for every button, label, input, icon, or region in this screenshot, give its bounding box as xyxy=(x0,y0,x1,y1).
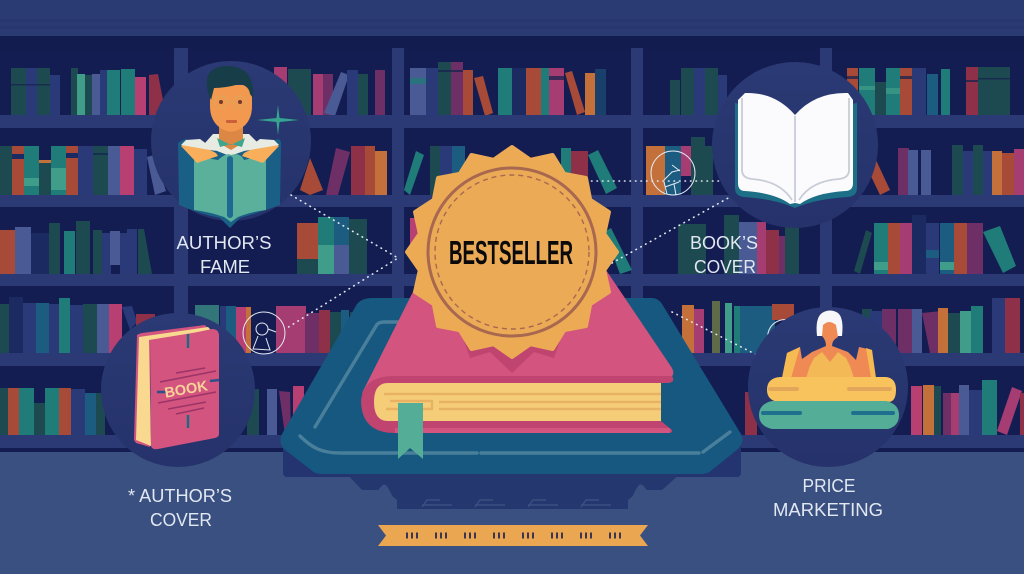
books: top shelf xyxy=(11,62,1010,116)
ribbon xyxy=(378,525,648,546)
badge title: BESTSELLER xyxy=(449,234,573,271)
label: COVER xyxy=(694,257,756,277)
circle xyxy=(101,313,255,467)
label: FAME xyxy=(200,257,250,277)
pink book xyxy=(361,270,673,459)
label xyxy=(773,476,883,520)
icon: sparkle xyxy=(257,105,299,135)
circle xyxy=(151,61,311,221)
label xyxy=(690,233,758,277)
shelf boards xyxy=(0,115,1024,448)
connector lines xyxy=(287,181,757,355)
book title: BOOK xyxy=(163,378,210,402)
books: third shelf xyxy=(0,215,1016,274)
bestseller badge xyxy=(407,147,617,373)
pages xyxy=(374,383,661,421)
label: BOOK’S xyxy=(690,233,758,253)
books: bottom shelf xyxy=(0,380,1024,435)
spine xyxy=(361,376,673,433)
small circle icon: hand xyxy=(651,151,695,195)
small circle icon: thinker xyxy=(243,312,285,354)
icon: closed book xyxy=(134,325,219,449)
icon: author reading xyxy=(178,66,281,228)
panel: price marketing xyxy=(748,307,908,520)
floor xyxy=(0,452,1024,574)
icon: person on cushions xyxy=(759,310,899,429)
platform base shadow xyxy=(280,440,744,520)
book platform xyxy=(280,298,744,520)
bookmark xyxy=(398,403,423,459)
books: fourth shelf xyxy=(0,297,1020,353)
panel: author's cover xyxy=(101,313,255,530)
book cover xyxy=(362,270,673,395)
label: PRICE xyxy=(802,476,856,496)
teal platform xyxy=(280,298,742,474)
label: * AUTHOR’S xyxy=(128,486,232,506)
label: MARKETING xyxy=(773,500,883,520)
circle xyxy=(712,62,878,228)
panel: author's fame xyxy=(151,61,311,277)
panel: book's cover xyxy=(690,62,878,277)
label xyxy=(128,486,232,530)
label: COVER xyxy=(150,510,212,530)
circle xyxy=(748,307,908,467)
label: AUTHOR’S xyxy=(176,233,272,253)
small arc icon xyxy=(768,320,788,340)
label xyxy=(176,233,272,277)
books: second shelf xyxy=(0,137,1024,195)
icon: open book xyxy=(735,93,857,208)
